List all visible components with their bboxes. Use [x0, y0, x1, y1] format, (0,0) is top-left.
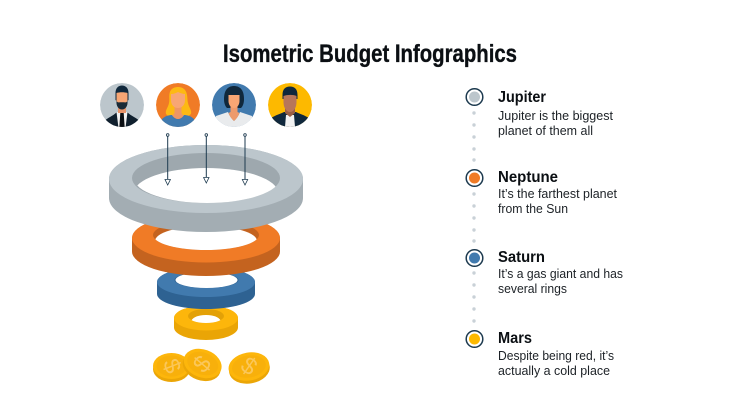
legend item: Neptune: It’s the farthest planet [498, 186, 617, 201]
legend item: Saturn: several rings [498, 281, 567, 296]
legend item: Mars: actually a cold place [498, 363, 610, 378]
legend item: Saturn: It’s a gas giant and has [498, 266, 623, 281]
legend item: Neptune [466, 169, 617, 216]
coin: middle [179, 344, 226, 386]
avatar: blonde woman [156, 83, 200, 127]
legend item: Mars: Mars [498, 330, 532, 347]
arrow: middle [204, 134, 209, 183]
coin: left [153, 353, 190, 382]
legend item: Jupiter: planet of them all [498, 123, 593, 138]
legend item: Saturn [466, 249, 623, 296]
arrow: right [242, 134, 248, 185]
funnel ring: gray [109, 145, 303, 232]
avatar: man in suit [100, 83, 144, 128]
avatar: dark-haired woman [212, 83, 256, 127]
title: Isometric Budget Infographics [223, 40, 517, 68]
funnel ring: yellow [174, 305, 238, 340]
coin: right: $ [235, 352, 262, 381]
funnel ring: blue [157, 267, 255, 309]
legend item: Mars: Despite being red, it’s [498, 348, 614, 363]
coin: right [226, 349, 272, 387]
coin: left: $ [158, 355, 186, 377]
arrow: left [165, 134, 170, 185]
coin: middle: $ [188, 351, 217, 378]
legend item: Mars [466, 330, 614, 378]
legend item: Neptune: Neptune [498, 169, 558, 186]
legend item: Saturn: Saturn [498, 249, 545, 266]
legend item: Jupiter: Jupiter is the biggest [498, 108, 613, 123]
legend item: Jupiter [466, 89, 613, 138]
legend item: Neptune: from the Sun [498, 201, 568, 216]
legend item: Jupiter: Jupiter [498, 89, 546, 106]
avatar: man in dark jacket [268, 83, 312, 127]
funnel ring: orange [132, 224, 280, 276]
